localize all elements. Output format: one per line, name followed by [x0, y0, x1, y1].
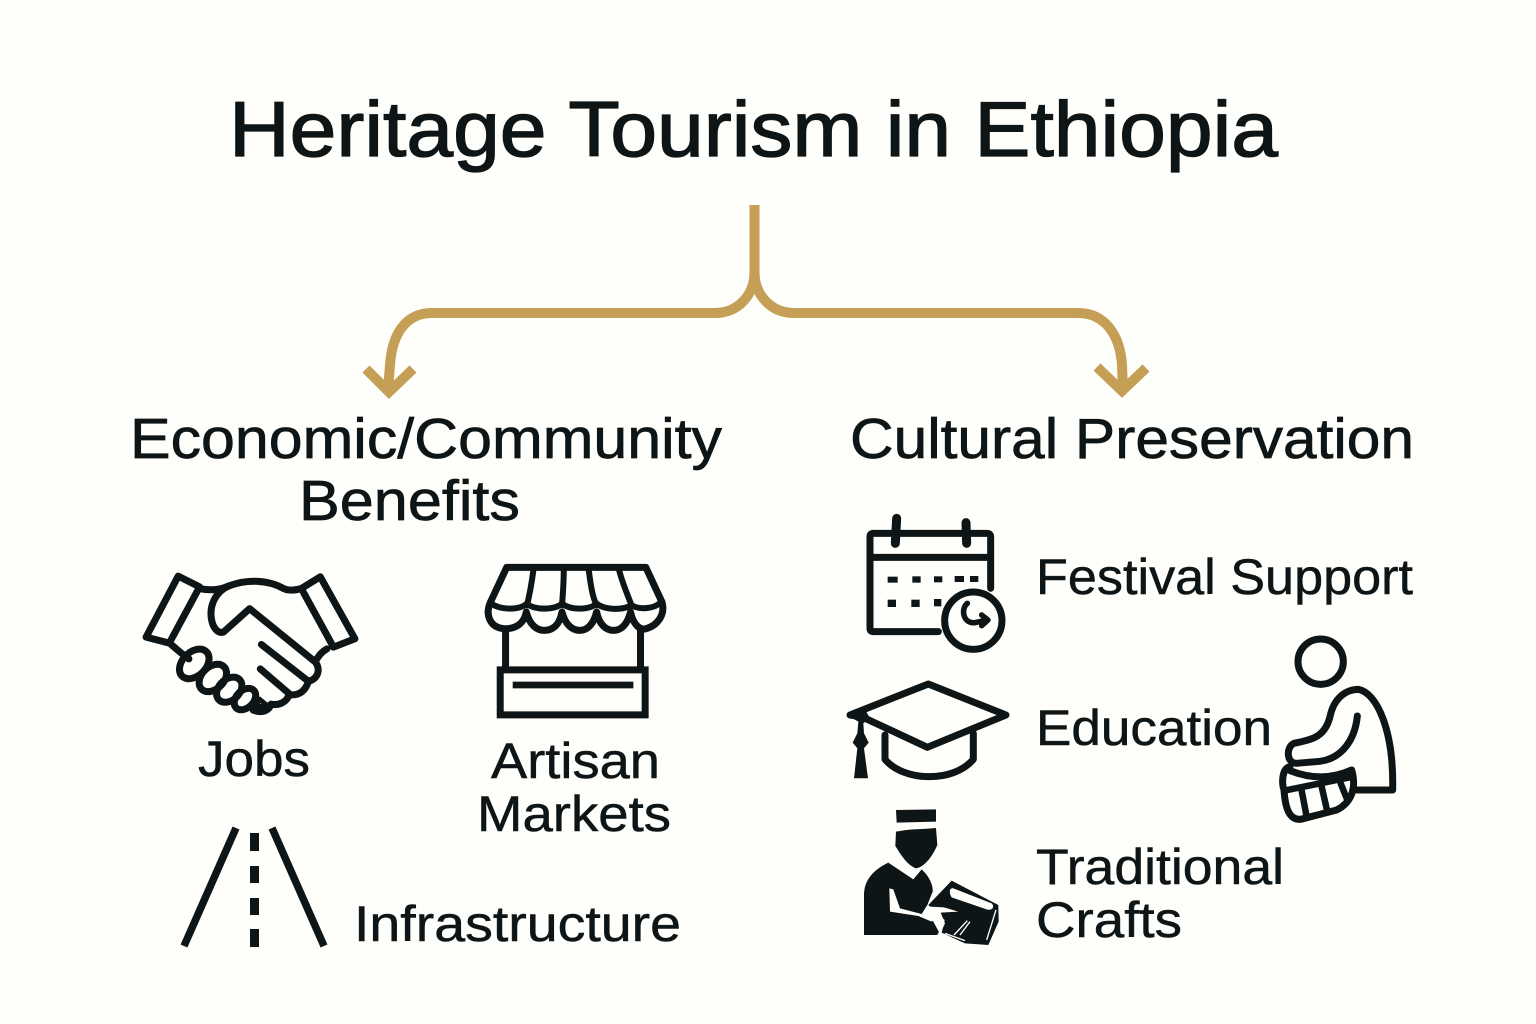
heading: economic community benefits: Economic/Community [130, 407, 723, 471]
heading: economic community benefits [130, 407, 723, 533]
label: artisan markets: Markets [477, 786, 671, 842]
panel: cultural preservation [847, 407, 1414, 948]
heading: economic community benefits: Benefits [299, 469, 520, 533]
label: infrastructure: Infrastructure [354, 896, 681, 952]
icon: calendar with clock [870, 518, 1002, 649]
label: festival support: Festival Support [1036, 549, 1413, 605]
label: traditional crafts: Traditional [1036, 839, 1284, 895]
arrows: branching connector [366, 205, 1146, 392]
heading: cultural preservation: Cultural Preservation [850, 407, 1414, 471]
icon: craftsperson with book [864, 809, 999, 945]
icon: market stall [488, 567, 663, 715]
icon: handshake [146, 576, 355, 714]
label: traditional crafts [1036, 839, 1284, 948]
title: Heritage Tourism in Ethiopia [229, 85, 1279, 173]
label: traditional crafts: Crafts [1036, 892, 1182, 948]
label: jobs: Jobs [198, 731, 310, 787]
panel: economic and community benefits [130, 407, 723, 952]
icon: person figure [1283, 639, 1393, 819]
label: artisan markets [477, 733, 671, 842]
icon: road [184, 828, 324, 947]
label: artisan markets: Artisan [491, 733, 660, 789]
label: education: Education [1036, 700, 1272, 756]
icon: graduation cap [847, 684, 1006, 778]
